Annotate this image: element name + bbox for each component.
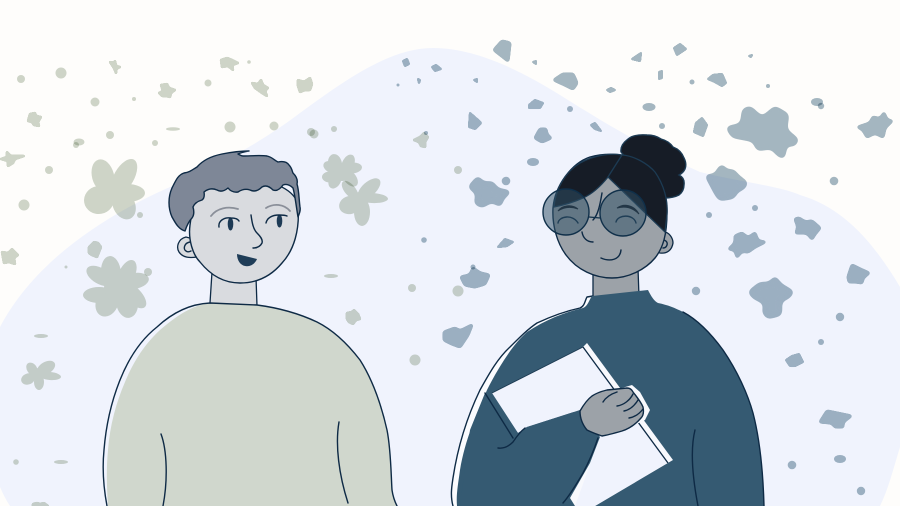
blue splat by hair	[707, 166, 746, 199]
woman sleeve	[460, 393, 600, 506]
woman glasses	[543, 189, 646, 236]
woman hair bun	[621, 135, 686, 198]
woman sweater outer outline	[451, 296, 593, 506]
blue splats right column	[729, 218, 869, 427]
woman neck	[593, 268, 639, 297]
man mouth	[237, 254, 257, 266]
man face features	[211, 205, 290, 266]
blue flower scatter	[396, 41, 892, 495]
large blue splat top right	[728, 108, 797, 157]
woman closed eyes and brows	[558, 193, 639, 223]
flower centre pair: lower	[337, 174, 388, 226]
man sweater outline	[103, 303, 397, 506]
large flower lower left	[83, 255, 151, 320]
flower centre pair: upper	[321, 152, 362, 191]
woman sleeve creases	[485, 393, 698, 506]
woman sweater white gap	[451, 296, 600, 506]
blue splats centre column	[444, 41, 577, 347]
man arm creases	[161, 422, 348, 506]
woman sweater fill	[457, 290, 764, 506]
man sweater fill	[107, 303, 397, 506]
green flower scatter	[1, 58, 464, 506]
blue splat far right	[858, 113, 892, 137]
small green flowers and specks	[1, 58, 464, 506]
man eyebrows	[211, 205, 290, 216]
blue splats top	[403, 44, 752, 136]
man neck	[210, 272, 257, 306]
book page strip	[560, 343, 673, 506]
book	[492, 343, 673, 506]
man ear	[178, 237, 197, 257]
large flower left	[82, 155, 145, 223]
woman hand	[580, 385, 650, 436]
man eyes	[219, 214, 287, 230]
book cover	[492, 347, 667, 506]
person: woman in blue sweater	[451, 135, 764, 506]
woman head	[553, 154, 667, 278]
man hair	[169, 151, 300, 231]
person: man in green sweater	[103, 151, 397, 506]
woman ear	[650, 232, 673, 253]
man nose	[251, 215, 262, 248]
hand shape	[580, 388, 643, 436]
woman hair	[554, 154, 667, 232]
man head	[190, 178, 298, 283]
book edge line	[583, 347, 668, 463]
flower bottom left	[20, 358, 61, 390]
woman sweater right edge	[683, 312, 764, 506]
blue dots	[396, 80, 865, 495]
book top edge	[492, 347, 583, 393]
woman nose and smile	[582, 232, 621, 260]
hand finger lines	[603, 392, 643, 418]
hand halo	[600, 385, 650, 432]
